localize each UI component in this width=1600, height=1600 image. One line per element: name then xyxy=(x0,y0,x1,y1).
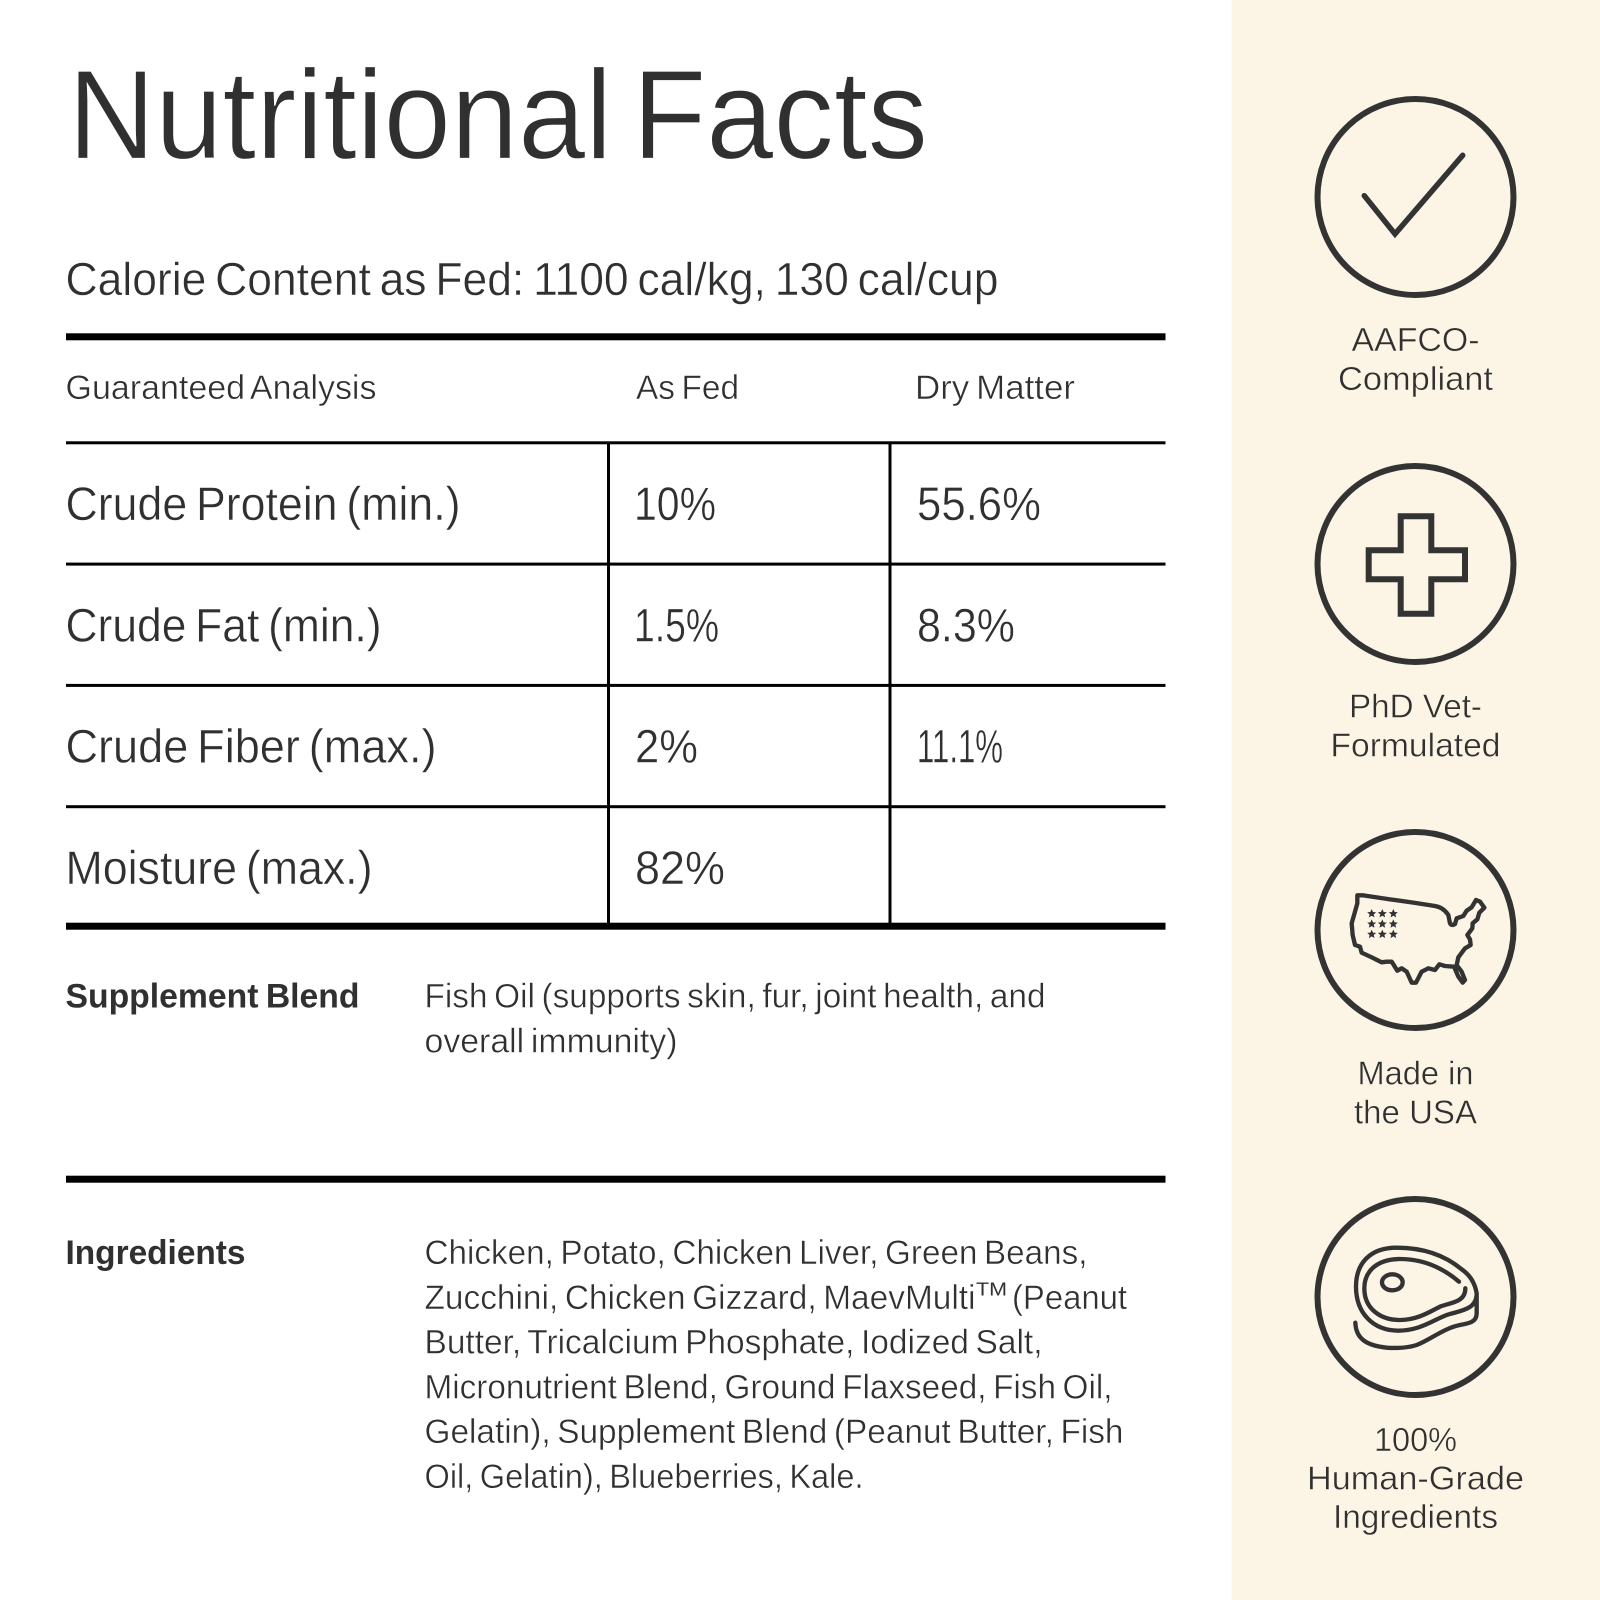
ingredients text xyxy=(424,1234,1128,1496)
title: Nutritional Facts xyxy=(68,44,928,186)
panel: supplement blend xyxy=(66,978,1046,1060)
icon: steak in circle xyxy=(1318,1199,1514,1395)
calorie content line: Calorie Content as Fed: 1100 cal/kg, 130 cal/cup xyxy=(66,253,998,305)
label: AAFCO-Compliant xyxy=(1338,321,1493,397)
label: PhD Vet-Formulated xyxy=(1330,688,1500,764)
row: crude fiber: 2% xyxy=(635,720,698,773)
row: crude fiber xyxy=(66,720,1003,773)
ingredients text: Micronutrient Blend, Ground Flaxseed, Fish Oil, xyxy=(424,1368,1112,1406)
panel: ingredients xyxy=(66,1234,1128,1496)
panel: cream sidebar background xyxy=(1232,0,1600,1600)
supplement blend text xyxy=(424,978,1046,1060)
label: Made in the USA: Made in xyxy=(1358,1054,1474,1092)
row: crude protein: Crude Protein (min.) xyxy=(66,477,460,530)
icon: medical cross in circle xyxy=(1318,466,1514,662)
label: 100% Human-Grade Ingredients: Human-Grade xyxy=(1307,1460,1524,1496)
ingredients text: Chicken, Potato, Chicken Liver, Green Beans, xyxy=(424,1234,1088,1272)
row: crude fat: 1.5% xyxy=(634,598,719,651)
label: Made in the USA xyxy=(1354,1054,1477,1130)
row: crude fat: Crude Fat (min.) xyxy=(66,598,382,651)
badge: PhD vet-formulated xyxy=(1318,466,1514,764)
supplement blend text: overall immunity) xyxy=(424,1022,678,1060)
label: AAFCO-Compliant: AAFCO- xyxy=(1352,321,1480,358)
supplement blend text: Fish Oil (supports skin, fur, joint health, and xyxy=(424,978,1046,1016)
row: crude fiber: Crude Fiber (max.) xyxy=(66,720,436,773)
table header: As Fed xyxy=(636,369,739,407)
label: 100% Human-Grade Ingredients: Ingredients xyxy=(1333,1498,1498,1535)
icon: flag stars xyxy=(1367,909,1398,938)
row: crude fat: 8.3% xyxy=(917,598,1015,651)
row: crude fiber: 11.1% xyxy=(917,720,1003,773)
row: moisture: Moisture (max.) xyxy=(66,841,372,894)
ingredients text: Oil, Gelatin), Blueberries, Kale. xyxy=(424,1458,864,1496)
ingredients text: Gelatin), Supplement Blend (Peanut Butter, Fish xyxy=(424,1413,1124,1451)
table header: Guaranteed Analysis xyxy=(66,369,376,407)
ingredients heading: Ingredients xyxy=(66,1234,246,1272)
badge: human-grade ingredients xyxy=(1307,1199,1524,1535)
ingredients text: Zucchini, Chicken Gizzard, MaevMulti xyxy=(424,1279,976,1317)
row: crude protein xyxy=(66,477,1041,530)
table rules xyxy=(66,333,1166,930)
ingredients text: Butter, Tricalcium Phosphate, Iodized Salt, xyxy=(424,1324,1042,1362)
label: PhD Vet-Formulated: PhD Vet- xyxy=(1349,688,1482,725)
row: crude fat xyxy=(66,598,1015,651)
label: PhD Vet-Formulated: Formulated xyxy=(1330,727,1500,764)
row: crude protein: 10% xyxy=(634,477,716,530)
divider rule xyxy=(66,1176,1166,1183)
badge: made in the USA xyxy=(1318,832,1514,1130)
ingredients text: (Peanut xyxy=(1012,1279,1128,1317)
label: 100% Human-Grade Ingredients: 100% xyxy=(1374,1421,1457,1458)
table header xyxy=(66,369,1075,407)
badge: AAFCO-compliant xyxy=(1318,99,1514,397)
label: Made in the USA: the USA xyxy=(1354,1094,1477,1130)
icon: USA map in circle xyxy=(1318,832,1514,1028)
table header: Dry Matter xyxy=(915,369,1075,407)
row: crude protein: 55.6% xyxy=(917,477,1041,530)
panel: guaranteed analysis table xyxy=(66,333,1166,930)
row: moisture: 82% xyxy=(635,841,725,894)
supplement blend heading: Supplement Blend xyxy=(66,978,360,1016)
label: AAFCO-Compliant: Compliant xyxy=(1338,360,1493,397)
ingredients text: TM xyxy=(976,1280,1007,1300)
row: moisture xyxy=(66,841,725,894)
label: 100% Human-Grade Ingredients xyxy=(1307,1421,1524,1535)
icon: check mark in circle xyxy=(1318,99,1514,295)
